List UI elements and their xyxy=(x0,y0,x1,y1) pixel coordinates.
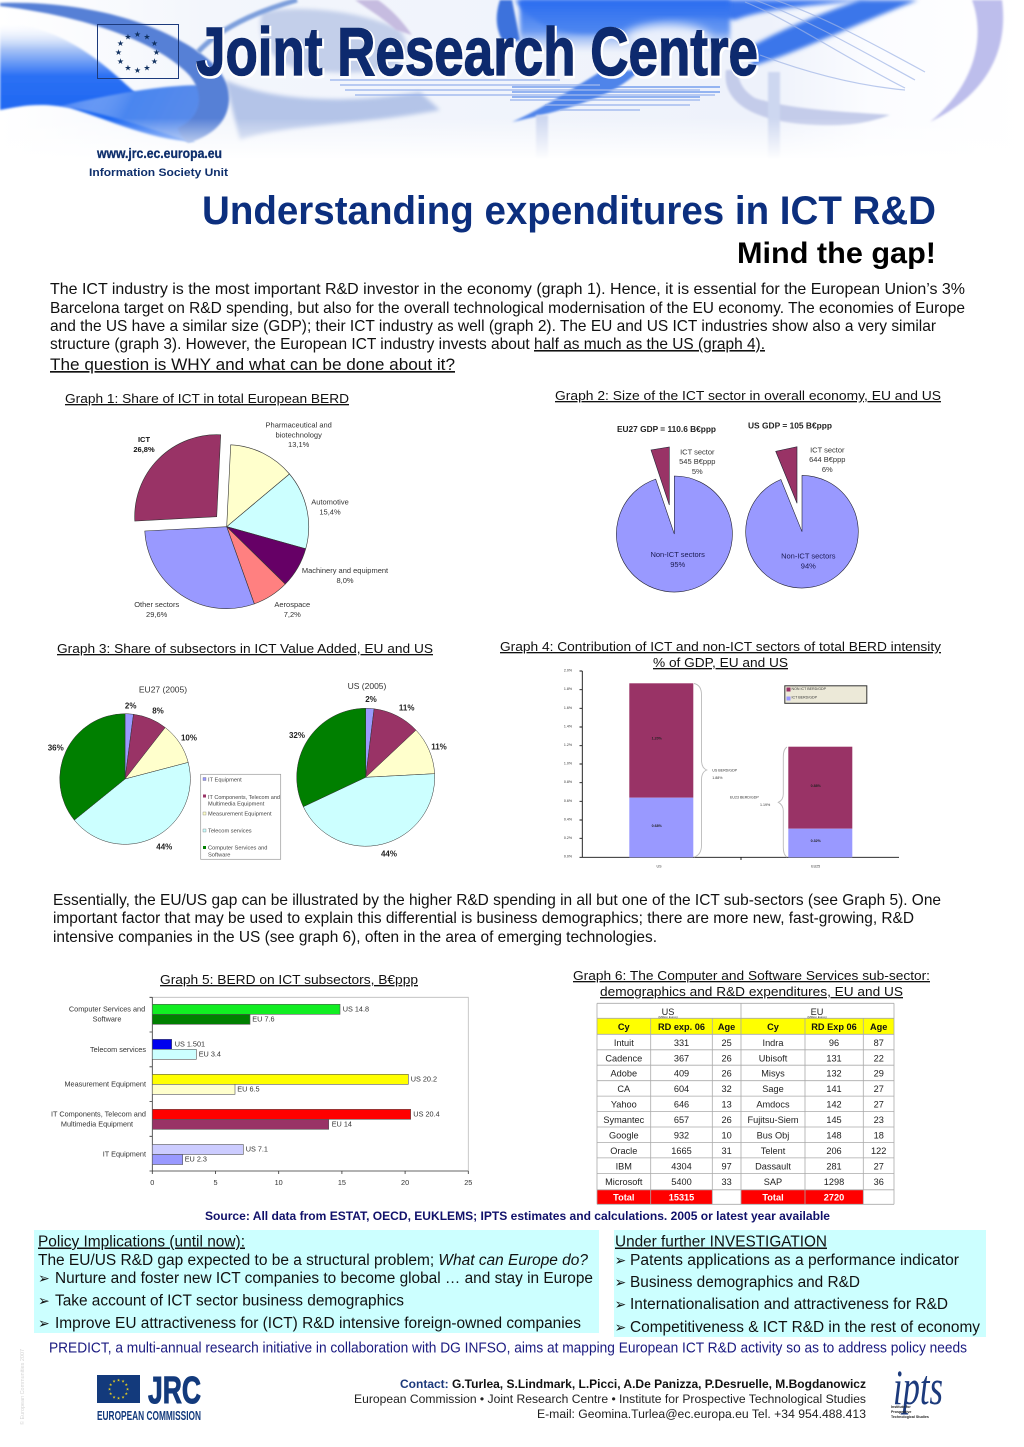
table rows: Google xyxy=(609,1130,639,1140)
chart: graph 2 EU pie xyxy=(616,447,732,592)
table rows: 932 xyxy=(674,1130,689,1140)
table rows: 18 xyxy=(874,1130,884,1140)
table rows: 27 xyxy=(874,1084,884,1094)
graph 1 labels: Other sectors xyxy=(134,600,179,609)
table rows: 604 xyxy=(674,1084,689,1094)
table group headers: (Million Euros) xyxy=(807,1015,827,1019)
table rows: Dassault xyxy=(755,1161,791,1171)
heading: graph 6 xyxy=(573,968,930,999)
panel: policy implications: Policy Implications (until now): xyxy=(38,1234,245,1250)
icon: EU flag outline with stars: ★★★★★★★★★★★★ xyxy=(115,30,160,75)
icon: JRC European Commission logo xyxy=(97,1370,201,1423)
table rows: 22 xyxy=(874,1053,884,1063)
legend: ICT BERD/GDP xyxy=(792,696,818,700)
chart: graph 3 US pie xyxy=(297,708,435,846)
category labels xyxy=(51,1004,146,1158)
table column headers: Age xyxy=(718,1022,735,1032)
value labels xyxy=(175,1004,440,1164)
table rows: CA xyxy=(617,1084,631,1094)
graph 3 labels: 36% xyxy=(48,744,64,752)
chart: graph 4 stacked bars xyxy=(564,668,899,868)
y axis labels: 0.2% xyxy=(564,836,573,840)
y axis labels xyxy=(564,668,573,858)
graph 2 labels: ICT sector xyxy=(810,446,845,454)
x axis labels: 15 xyxy=(338,1178,346,1187)
heading: graph 4: Graph 4: Contribution of ICT and non-ICT sectors of total BERD intensity xyxy=(500,639,941,654)
table column headers: Age xyxy=(870,1022,887,1032)
category labels: Telecom services xyxy=(90,1045,146,1054)
table column headers xyxy=(618,1022,887,1032)
y axis labels: 1.8% xyxy=(564,687,573,691)
legend: NON ICT BERD/GDP xyxy=(792,687,827,691)
table rows: 148 xyxy=(826,1130,842,1140)
x axis labels: 10 xyxy=(275,1178,283,1187)
table rows xyxy=(603,1038,886,1187)
main title: Understanding expenditures in ICT R&D xyxy=(202,189,936,233)
graph 3 labels: EU27 (2005) xyxy=(139,684,187,694)
graph 3 labels: 44% xyxy=(156,842,172,852)
panel: policy implications: ➢ xyxy=(38,1316,50,1332)
paragraph: EU/US gap: important factor that may be used to explain this differential is business demographics; there are more new, fast-growing, R&D xyxy=(53,910,914,927)
x axis labels: 25 xyxy=(464,1178,472,1187)
table totals xyxy=(613,1192,844,1202)
legend: graph 3: IT Components, Telecom and xyxy=(208,795,280,801)
category labels: Multimedia Equipment xyxy=(61,1120,133,1128)
table rows: 131 xyxy=(826,1053,842,1063)
panel: under further investigation: ➢ xyxy=(614,1275,626,1291)
panel: under further investigation: ➢ xyxy=(614,1297,626,1313)
chart: graph 2 US pie xyxy=(746,447,858,588)
graph 3 labels: 2% xyxy=(125,702,136,710)
contact block: Contact: G.Turlea, S.Lindmark, L.Picci, A.De Panizza, P.Desruelle, M.Bogdanowicz xyxy=(400,1377,866,1391)
table rows: 36 xyxy=(874,1177,884,1187)
US brace xyxy=(694,684,738,857)
graph 2 labels: Non-ICT sectors xyxy=(650,550,705,559)
EU bar xyxy=(788,747,852,868)
table rows: Intuit xyxy=(614,1038,634,1048)
graph 3 labels: 10% xyxy=(181,734,197,742)
table group headers: (Million Euros) xyxy=(658,1015,678,1019)
EU bar: 0.32% xyxy=(811,839,822,843)
graph 2 labels: 6% xyxy=(822,465,833,474)
chart: graph 1 pie xyxy=(135,435,309,609)
table group headers xyxy=(658,1007,827,1019)
table rows: 657 xyxy=(674,1115,689,1125)
unit name: Information Society Unit xyxy=(89,167,228,179)
table rows: 331 xyxy=(674,1038,689,1048)
heading: graph 5: Graph 5: BERD on ICT subsectors, B€ppp xyxy=(160,972,418,987)
graph 2 labels: ICT sector xyxy=(680,448,715,456)
graph 1 labels: Automotive xyxy=(311,498,349,506)
copyright side text: © European Communities 2007 xyxy=(19,1349,26,1425)
EU brace xyxy=(730,747,787,857)
graph 3 labels: 44% xyxy=(381,850,397,858)
table: graph 6 xyxy=(597,1003,894,1204)
table rows: SAP xyxy=(764,1177,782,1187)
value labels: US 20.2 xyxy=(411,1074,437,1084)
icon: IPTS logo xyxy=(891,1359,943,1419)
y axis labels: 0.8% xyxy=(564,780,573,784)
table rows: 25 xyxy=(721,1038,732,1048)
US brace: US BERD/GDP xyxy=(712,768,738,772)
graph 2 labels: 644 B€ppp xyxy=(809,455,845,464)
table rows: Ubisoft xyxy=(759,1053,788,1063)
table rows: Indra xyxy=(763,1038,784,1048)
heading: graph 4: % of GDP, EU and US xyxy=(653,655,788,670)
table rows: 31 xyxy=(721,1146,732,1156)
paragraph: EU/US gap: intensive companies in the US (see graph 6), often in the area of emerging technologies. xyxy=(53,929,657,946)
table rows: 26 xyxy=(721,1053,732,1063)
y axis labels: 0.4% xyxy=(564,818,573,822)
icon: IPTS logo: ipts xyxy=(893,1359,943,1415)
contact block xyxy=(354,1377,866,1421)
graph 1 labels: Machinery and equipment xyxy=(302,566,389,575)
legend: graph 3: Measurement Equipment xyxy=(208,812,272,818)
category labels: IT Equipment xyxy=(103,1150,146,1158)
category labels: IT Components, Telecom and xyxy=(51,1110,146,1118)
panel: policy implications: Take account of ICT sector business demographics xyxy=(55,1292,404,1310)
US bar: US xyxy=(656,864,662,868)
icon: IPTS logo: Prospective xyxy=(891,1410,911,1414)
table rows: Yahoo xyxy=(611,1100,637,1110)
icon: IPTS logo: Institute for xyxy=(891,1405,911,1409)
panel: under further investigation: ➢ xyxy=(614,1320,626,1336)
graph 3 labels: 32% xyxy=(289,731,305,740)
US bar xyxy=(629,683,693,868)
US bar: 0.68% xyxy=(652,824,663,828)
table column headers: RD Exp 06 xyxy=(811,1022,857,1032)
table totals: 15315 xyxy=(669,1192,694,1202)
table rows: 27 xyxy=(874,1100,884,1110)
table group headers: EU xyxy=(811,1007,823,1017)
table rows: Adobe xyxy=(611,1069,637,1079)
category labels: Measurement Equipment xyxy=(64,1080,146,1088)
graph 1 labels xyxy=(133,420,389,619)
y axis labels: 1.0% xyxy=(564,762,573,766)
US bar: 1.20% xyxy=(652,736,663,740)
website address: www.jrc.ec.europa.eu xyxy=(96,145,222,161)
legend: graph 3: Software xyxy=(208,853,230,859)
graph 2 labels: US GDP = 105 B€ppp xyxy=(748,422,832,430)
graph 3 labels xyxy=(48,681,447,858)
table rows: 26 xyxy=(721,1115,732,1125)
table rows: 122 xyxy=(871,1146,886,1156)
table group headers: US xyxy=(662,1007,674,1017)
y axis labels: 0.0% xyxy=(564,854,573,858)
table column headers: Cy xyxy=(618,1022,631,1032)
source line: Source: All data from ESTAT, OECD, EUKLEMS; IPTS estimates and calculations. 2005 or latest year available xyxy=(205,1209,830,1223)
value labels: EU 14 xyxy=(332,1120,352,1128)
graph 1 labels: 8,0% xyxy=(336,576,354,585)
table column headers: RD exp. 06 xyxy=(658,1022,705,1032)
table rows: 26 xyxy=(721,1069,732,1079)
table rows: 1298 xyxy=(824,1177,844,1187)
graph 2 labels: 545 B€ppp xyxy=(679,457,715,466)
value labels: US 7.1 xyxy=(246,1144,268,1154)
chart: graph 5 horizontal bars xyxy=(51,997,472,1187)
EU brace: EU23 BERD/GDP xyxy=(730,796,759,800)
graph 3 labels: 11% xyxy=(399,704,414,712)
icon: JRC European Commission logo: JRC xyxy=(148,1370,201,1412)
intro paragraph: and the US have a similar size (GDP); their ICT industry as well (graph 2). The EU and US ICT industries show also a very similar xyxy=(50,318,936,335)
table rows: 142 xyxy=(826,1100,842,1110)
graph 3 labels: 2% xyxy=(365,695,377,704)
intro paragraph: The ICT industry is the most important R&D investor in the economy (graph 1). Hence, it is essential for the European Union’s 3% xyxy=(50,281,965,298)
panel: under further investigation: Under further INVESTIGATION xyxy=(615,1234,827,1250)
table rows: 29 xyxy=(874,1069,884,1079)
graph 2 labels: 94% xyxy=(801,562,816,570)
heading: graph 3: Graph 3: Share of subsectors in ICT Value Added, EU and US xyxy=(57,641,433,656)
category labels: Software xyxy=(93,1014,121,1024)
table rows: Cadence xyxy=(605,1053,642,1063)
header background artwork xyxy=(0,0,1024,160)
table totals: Total xyxy=(613,1192,634,1202)
panel: policy implications xyxy=(34,1230,599,1333)
panel: policy implications: Nurture and foster new ICT companies to become global … and stay in Europe xyxy=(55,1270,593,1287)
panel: under further investigation: Business demographics and R&D xyxy=(630,1274,860,1291)
value labels: EU 2.3 xyxy=(185,1154,207,1164)
graph 3 labels: 11% xyxy=(431,742,447,752)
table rows: 281 xyxy=(826,1161,842,1171)
heading: graph 4 xyxy=(500,639,941,670)
panel: policy implications: ➢ xyxy=(38,1271,50,1287)
table rows: 10 xyxy=(721,1130,732,1140)
table totals: 2720 xyxy=(824,1192,844,1202)
table rows: 5400 xyxy=(671,1177,692,1187)
EU bar: 0.88% xyxy=(811,784,822,788)
graph 2 labels: 95% xyxy=(670,560,686,569)
table rows: 409 xyxy=(674,1069,689,1079)
table rows: 646 xyxy=(674,1100,689,1110)
graph 1 labels: 29,6% xyxy=(146,610,168,619)
icon: JRC European Commission logo: EUROPEAN COMMISSION xyxy=(97,1409,201,1423)
table rows: 1665 xyxy=(671,1146,692,1156)
value labels: EU 6.5 xyxy=(237,1084,260,1094)
heading: graph 1: Graph 1: Share of ICT in total European BERD xyxy=(65,391,349,406)
value labels: EU 3.4 xyxy=(199,1050,221,1058)
panel: under further investigation: Competitiveness & ICT R&D in the rest of economy xyxy=(630,1319,980,1336)
panel: policy implications: Improve EU attractiveness for (ICT) R&D intensive foreign-owned companies xyxy=(55,1315,581,1332)
panel: under further investigation: ➢ xyxy=(614,1253,626,1269)
table rows: Telent xyxy=(761,1146,786,1156)
table rows: Symantec xyxy=(603,1115,645,1125)
y axis labels: 1.6% xyxy=(564,706,573,710)
table rows: 87 xyxy=(874,1038,884,1048)
graph 1 labels: 15,4% xyxy=(319,508,341,516)
table rows: 367 xyxy=(674,1053,689,1063)
heading: graph 6: demographics and R&D expenditures, EU and US xyxy=(600,984,903,999)
table rows: 132 xyxy=(826,1069,842,1079)
legend: graph 3: Computer Services and xyxy=(208,846,267,852)
graph 2 labels: 5% xyxy=(692,467,703,476)
table rows: 27 xyxy=(874,1161,884,1171)
intro paragraph: Barcelona target on R&D spending, but also for the overall technological modernisation of the EU economy. The economies of Europe xyxy=(50,300,965,317)
heading: graph 2: Graph 2: Size of the ICT sector in overall economy, EU and US xyxy=(555,388,941,403)
legend xyxy=(785,686,867,703)
value labels: US 14.8 xyxy=(343,1004,369,1014)
paragraph: EU/US gap xyxy=(53,892,941,946)
graph 1 labels: 7,2% xyxy=(284,610,301,619)
icon: EU flag outline with stars xyxy=(98,24,178,78)
y axis labels: 0.6% xyxy=(564,799,573,803)
table rows: Oracle xyxy=(610,1146,637,1156)
graph 1 labels: 13,1% xyxy=(288,440,310,449)
graph 1 labels: biotechnology xyxy=(276,430,322,440)
x axis labels: 5 xyxy=(213,1178,218,1187)
category labels: Computer Services and xyxy=(69,1004,145,1014)
table rows: Misys xyxy=(761,1069,785,1079)
graph 3 labels: US (2005) xyxy=(348,681,387,691)
icon: JRC European Commission logo: ★★★★★★★★★★★★ xyxy=(108,1378,130,1400)
intro paragraph: The question is WHY and what can be done about it? xyxy=(50,355,455,374)
y axis labels: 2.0% xyxy=(564,668,573,672)
paragraph: EU/US gap: Essentially, the EU/US gap can be illustrated by the higher R&D spending in all but one of the ICT sub-sectors (see Graph 5). One xyxy=(53,892,941,909)
table rows: Sage xyxy=(762,1084,784,1094)
value labels: EU 7.6 xyxy=(252,1014,275,1024)
EU brace: 1.19% xyxy=(760,803,771,807)
value labels: US 20.4 xyxy=(413,1110,440,1118)
table rows: IBM xyxy=(616,1161,632,1171)
table rows: Fujitsu-Siem xyxy=(747,1115,799,1125)
table column headers: Cy xyxy=(767,1022,780,1032)
graph 2 labels: EU27 GDP = 110.6 B€ppp xyxy=(617,425,716,434)
graph 1 labels: 26,8% xyxy=(133,445,155,454)
heading: graph 6: Graph 6: The Computer and Software Services sub-sector: xyxy=(573,968,930,983)
US brace: 1.88% xyxy=(712,776,723,780)
contact block: European Commission • Joint Research Centre • Institute for Prospective Technological Studies xyxy=(354,1392,866,1406)
panel: under further investigation: Internationalisation and attractiveness for R&D xyxy=(630,1296,948,1313)
panel: under further investigation xyxy=(614,1230,986,1337)
y axis labels: 1.2% xyxy=(564,743,573,747)
intro paragraph: structure (graph 3). However, the European ICT industry invests about half as much as the US (graph 4). xyxy=(50,336,765,353)
y axis labels: 1.4% xyxy=(564,724,573,728)
graph 1 labels: Aerospace xyxy=(274,600,310,609)
table totals: Total xyxy=(762,1192,784,1202)
table rows: 96 xyxy=(829,1038,839,1048)
chart: graph 3 EU pie xyxy=(60,714,190,844)
legend: graph 3: IT Equipment xyxy=(208,778,242,784)
graph 2 labels: Non-ICT sectors xyxy=(781,552,836,560)
legend: graph 3 xyxy=(201,774,281,859)
table rows: 206 xyxy=(826,1146,842,1156)
table rows: 145 xyxy=(826,1115,842,1125)
icon: IPTS logo: Technological Studies xyxy=(891,1415,929,1419)
table rows: 33 xyxy=(721,1177,732,1187)
table rows: Bus Obj xyxy=(757,1130,789,1140)
graph 1 labels: Pharmaceutical and xyxy=(266,420,332,430)
panel: under further investigation: Patents applications as a performance indicator xyxy=(630,1252,959,1269)
table rows: 13 xyxy=(721,1100,732,1110)
table rows: 4304 xyxy=(671,1161,692,1171)
EU bar: EU25 xyxy=(811,864,820,868)
panel: policy implications: The EU/US R&D gap expected to be a structural problem; What can Europe do? xyxy=(38,1252,588,1269)
table rows: Amdocs xyxy=(756,1100,790,1110)
PREDICT statement: PREDICT, a multi-annual research initiative in collaboration with DG INFSO, aims at mapping European ICT R&D activity so as to address policy needs xyxy=(49,1340,967,1356)
x axis labels: 20 xyxy=(401,1178,409,1187)
table rows: 141 xyxy=(826,1084,842,1094)
graph 3 labels: 8% xyxy=(152,706,164,716)
intro paragraph xyxy=(50,281,965,374)
subtitle: Mind the gap! xyxy=(737,237,936,270)
header title: Joint Research Centre: Joint Research Centre xyxy=(196,14,758,90)
graph 2 labels xyxy=(617,422,845,570)
table rows: 97 xyxy=(721,1161,732,1171)
legend: graph 3: Multimedia Equipment xyxy=(208,802,265,808)
table rows: 23 xyxy=(874,1115,884,1125)
x axis labels xyxy=(150,1178,472,1187)
x axis labels: 0 xyxy=(150,1178,154,1187)
value labels: US 1.501 xyxy=(175,1040,205,1048)
legend: graph 3: Telecom services xyxy=(208,828,252,834)
graph 1 labels: ICT xyxy=(138,435,150,444)
panel: policy implications: ➢ xyxy=(38,1294,50,1310)
bars xyxy=(152,1004,411,1164)
contact block: E-mail: Geomina.Turlea@ec.europa.eu Tel. +34 954.488.413 xyxy=(537,1407,866,1421)
table rows: 32 xyxy=(721,1084,732,1094)
table rows: Microsoft xyxy=(605,1177,643,1187)
